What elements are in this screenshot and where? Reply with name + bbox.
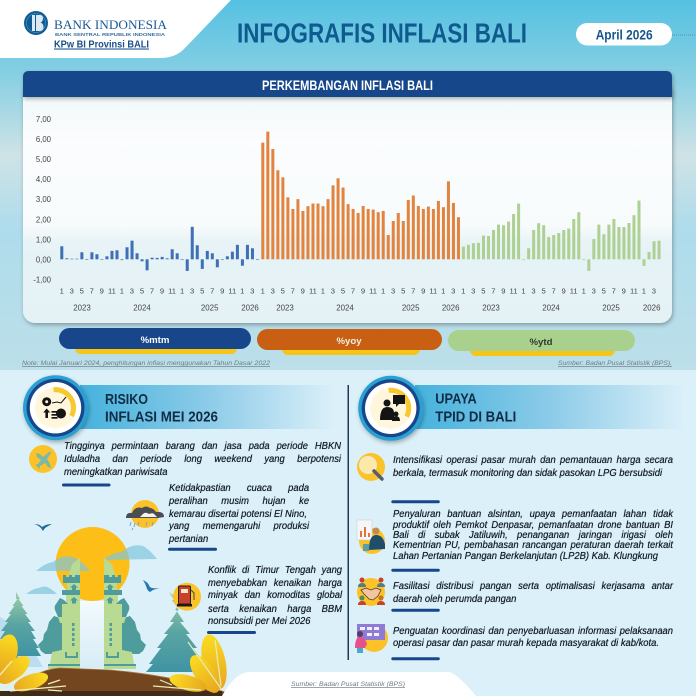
bottom white tab	[222, 672, 476, 696]
x axis years: 2025	[402, 304, 420, 312]
text: risiko 2: yang memengaruhi produksi	[169, 521, 309, 532]
x axis months: mtm: 1	[120, 286, 124, 296]
x axis months: yoy: 7	[411, 286, 415, 296]
x axis months: mtm: 5	[200, 286, 204, 296]
x axis months: ytd: 3	[592, 286, 596, 296]
text: risiko 2: pertanian	[169, 534, 208, 545]
x axis years: 2023	[276, 304, 294, 312]
x axis months: ytd: 1	[461, 286, 465, 296]
legend: ytd	[448, 330, 635, 356]
x axis months: yoy: 3	[271, 286, 275, 296]
x axis months: ytd: 7	[491, 286, 496, 296]
x axis months: mtm: 1	[180, 286, 184, 296]
x axis months: mtm: 9	[220, 286, 224, 296]
section header: risiko: RISIKO	[105, 392, 148, 408]
x axis months: ytd: 3	[471, 286, 475, 296]
x axis months: mtm: 1	[240, 286, 244, 296]
logo: Bank Indonesia: BANK INDONESIA	[54, 17, 168, 32]
x axis months: ytd: 9	[622, 286, 626, 296]
legend: mtm	[59, 328, 251, 354]
text: risiko 2	[168, 483, 310, 545]
y axis labels: 5,00	[36, 155, 52, 164]
date badge	[576, 23, 696, 46]
text: upaya 3	[393, 581, 674, 605]
icon: cloud and rain	[126, 500, 164, 530]
bar chart: yoy	[261, 132, 460, 259]
x axis years: 2024	[542, 304, 560, 312]
x axis years: 2023	[73, 304, 91, 312]
icon: calendar and person	[355, 624, 388, 653]
top background	[0, 0, 696, 370]
x axis months: yoy	[261, 286, 455, 296]
x axis years: 2026	[643, 304, 661, 312]
x axis months: yoy: 9	[361, 286, 365, 296]
y axis labels: 4,00	[36, 175, 52, 184]
legend: yoy: %yoy	[336, 336, 362, 347]
x axis months: mtm: 11	[228, 286, 236, 296]
x axis months: ytd	[461, 286, 656, 296]
x axis years	[73, 304, 661, 312]
x axis months: ytd: 3	[531, 286, 536, 296]
gate: left tower	[38, 558, 80, 669]
logo: Bank Indonesia: KPw BI Provinsi BALI	[54, 38, 149, 50]
icon: magnifier	[357, 453, 385, 481]
text: risiko 2: peralihan musim hujan ke	[169, 496, 309, 507]
text: risiko 3	[208, 565, 343, 627]
x axis months: ytd: 9	[501, 286, 506, 296]
text: upaya 2: Bali di subak Jatiluwih, penanganan jaringan irigasi oleh	[393, 530, 673, 540]
text: risiko 3: nonsubsidi per Mei 2026	[208, 616, 310, 627]
x axis months: yoy: 9	[301, 286, 305, 296]
x axis years: 2023	[482, 304, 500, 312]
legend: mtm: %mtm	[141, 335, 169, 346]
y axis labels: 1,00	[36, 235, 52, 244]
x axis months: mtm: 5	[140, 286, 144, 296]
section header: upaya: TPID DI BALI	[435, 410, 516, 426]
x axis months: yoy: 11	[369, 286, 377, 296]
badge: upaya	[358, 376, 423, 441]
y axis labels: 2,00	[36, 215, 52, 224]
section header: risiko: INFLASI MEI 2026	[105, 410, 218, 426]
mountains	[0, 617, 125, 668]
header white tab	[0, 0, 231, 58]
x axis months: mtm: 11	[108, 286, 116, 296]
leaves: right	[153, 632, 231, 696]
text: upaya 2: produktif oleh Pemkot Denpasar, pemanfaatan drone bantuan BI	[393, 520, 673, 530]
x axis months: yoy: 7	[351, 286, 355, 296]
tree: left	[0, 592, 41, 670]
x axis months: yoy: 9	[421, 286, 425, 296]
illustration: bali gate	[0, 524, 231, 696]
section header: risiko	[23, 375, 335, 440]
x axis months: mtm	[60, 286, 254, 296]
text: upaya 4	[393, 626, 673, 649]
x axis months: yoy: 5	[281, 286, 285, 296]
bird: right	[143, 580, 160, 592]
text: risiko 1: meningkatkan pariwisata	[64, 466, 167, 478]
logo: Bank Indonesia: BANK SENTRAL REPUBLIK INDONESIA	[55, 32, 166, 37]
legend: yoy	[257, 329, 442, 355]
clouds	[26, 545, 157, 594]
tree: right	[146, 592, 208, 672]
text: upaya 3: daerah oleh perumda pangan	[393, 594, 516, 605]
logo emblem	[24, 11, 48, 35]
text: risiko 2: Ketidakpastian cuaca pada	[169, 483, 309, 494]
x axis months: ytd: 9	[561, 286, 566, 296]
x axis years: 2026	[241, 304, 259, 312]
text: risiko 1: Tingginya permintaan barang dan jasa pada periode HBKN	[64, 441, 341, 452]
hill	[15, 668, 225, 696]
x axis months: mtm: 3	[70, 286, 74, 296]
title: INFOGRAFIS INFLASI BALI	[237, 18, 527, 49]
x axis months: mtm: 7	[150, 286, 154, 296]
text: upaya 1: Intensifikasi operasi pasar murah dan pemantauan harga secara	[393, 455, 673, 466]
x axis months: ytd: 11	[510, 286, 517, 296]
sun	[56, 527, 130, 601]
badge: risiko	[23, 375, 88, 440]
icon: inflation risk	[42, 397, 66, 419]
x axis months: ytd: 7	[612, 286, 616, 296]
text: upaya 4: operasi pasar dan pasar murah kepada masyarakat di kab/kota.	[393, 638, 659, 649]
x axis years: 2024	[336, 304, 354, 312]
bottom background	[0, 370, 696, 696]
x axis months: mtm: 11	[168, 286, 176, 296]
x axis months: yoy: 1	[261, 286, 265, 296]
x axis months: ytd: 11	[630, 286, 638, 296]
y axis labels: 0,00	[36, 255, 52, 264]
x axis months: mtm: 3	[130, 286, 134, 296]
text: upaya 1	[392, 455, 673, 479]
x axis months: yoy: 3	[331, 286, 335, 296]
text: risiko 3: serta kenaikan harga BBM	[208, 604, 342, 615]
panel: chart	[23, 71, 672, 323]
text: upaya 2: Kementrian PU, pembahasan rancangan peraturan daerah terkait	[393, 540, 673, 551]
bird: left	[34, 524, 52, 531]
x axis months: yoy: 1	[321, 286, 325, 296]
x axis years: 2024	[133, 304, 151, 312]
section header: upaya	[358, 376, 685, 441]
x axis months: ytd: 1	[642, 286, 646, 296]
icon: handshake	[357, 578, 385, 606]
x axis months: mtm: 1	[60, 286, 64, 296]
chart header bar: PERKEMBANGAN INFLASI BALI	[262, 78, 433, 93]
note: Note: Mulai Januari 2024, penghitungan inflasi menggunakan Tahun Dasar 2022	[22, 360, 270, 367]
vertical divider	[348, 385, 349, 660]
x axis years: 2025	[201, 304, 219, 312]
x axis months: yoy: 5	[341, 286, 345, 296]
x axis months: yoy: 11	[429, 286, 437, 296]
text: upaya 2: Penyaluran bantuan alsintan, upaya pemanfaatan lahan tidak	[393, 509, 673, 520]
x axis months: ytd: 3	[652, 286, 656, 296]
x axis months: yoy: 7	[291, 286, 295, 296]
x axis months: mtm: 9	[100, 286, 104, 296]
icon: airplane	[29, 445, 57, 473]
x axis months: mtm: 9	[160, 286, 164, 296]
x axis months: mtm: 5	[80, 286, 84, 296]
text: risiko 2: kemarau disertai potensi El Nino,	[169, 509, 307, 520]
bar chart: ytd	[462, 201, 661, 271]
icon: people and speech bubble	[380, 395, 405, 421]
text: risiko 3: minyak dan komoditas global	[208, 590, 342, 601]
icon: presenter with chart	[357, 520, 385, 554]
x axis months: yoy: 5	[401, 286, 405, 296]
gate gap	[80, 601, 104, 668]
text: upaya 2	[392, 509, 674, 562]
x axis months: ytd: 1	[521, 286, 526, 296]
text: risiko 3: menyebabkan kenaikan harga	[208, 578, 342, 589]
text: upaya 4: Penguatan koordinasi dan penyebarluasan informasi pelaksanaan	[393, 626, 673, 636]
leaves: left	[0, 632, 66, 695]
x axis months: mtm: 7	[210, 286, 214, 296]
x axis months: ytd: 7	[551, 286, 556, 296]
source: chart: Sumber: Badan Pusat Statistik (BPS).	[558, 360, 672, 367]
y axis labels: -1,00	[33, 276, 52, 284]
chart header bar	[23, 71, 672, 97]
y axis labels: 7,00	[36, 115, 52, 124]
x axis months: yoy: 11	[309, 286, 317, 296]
bar chart: mtm	[60, 227, 259, 271]
icon: fuel pump	[173, 583, 201, 611]
text: upaya 2: Lahan Pertanian Pangan Berkelanjutan (LP2B) Kab. Klungkung	[393, 550, 658, 562]
y axis labels: 3,00	[36, 195, 52, 204]
source: bottom: Sumber: Badan Pusat Statistik (BPS)	[291, 681, 405, 688]
x axis months: ytd: 11	[570, 286, 578, 296]
text: risiko 1: Iduladha dan periode long weekend yang berpotensi	[64, 454, 341, 465]
x axis months: mtm: 3	[190, 286, 194, 296]
text: upaya 1: berkala, termasuk monitoring dan sidak pasokan LPG bersubsidi	[393, 468, 662, 479]
text: risiko 3: Konflik di Timur Tengah yang	[208, 565, 342, 576]
x axis months: ytd: 5	[541, 286, 546, 296]
rules under text	[62, 484, 440, 660]
x axis months: mtm: 7	[90, 286, 94, 296]
x axis years: 2025	[602, 304, 620, 312]
legend: ytd: %ytd	[530, 337, 553, 348]
x axis months: mtm: 3	[250, 286, 254, 296]
date badge: April 2026	[596, 26, 653, 42]
x axis months: ytd: 5	[481, 286, 486, 296]
x axis months: yoy: 1	[381, 286, 385, 296]
gate: right tower	[104, 558, 146, 669]
x axis months: ytd: 5	[602, 286, 606, 296]
text: risiko 1	[64, 441, 342, 478]
x axis months: yoy: 1	[441, 286, 445, 296]
section header: upaya: UPAYA	[435, 392, 477, 408]
logo: Bank Indonesia	[24, 11, 168, 50]
y axis labels: 6,00	[36, 135, 52, 144]
y axis labels	[33, 115, 52, 284]
x axis months: yoy: 3	[451, 286, 455, 296]
x axis months: yoy: 3	[391, 286, 395, 296]
text: upaya 3: Fasilitasi distribusi pangan serta optimalisasi kerjasama antar	[393, 581, 673, 592]
x axis months: ytd: 1	[582, 286, 586, 296]
x axis years: 2026	[442, 304, 460, 312]
